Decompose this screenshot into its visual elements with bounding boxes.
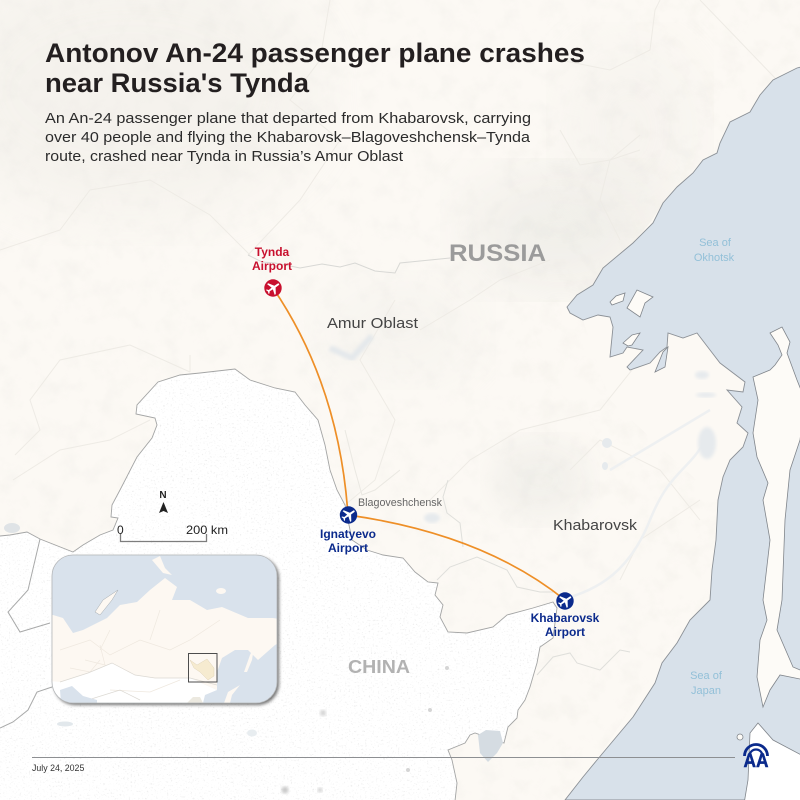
marker: Khabarovsk Airport: Airport xyxy=(545,625,585,639)
Russia-China border and white neighbouring land xyxy=(0,369,557,800)
subtitle: route, crashed near Tynda in Russia’s Amur Oblast xyxy=(45,148,404,165)
lake Khanka xyxy=(478,730,503,762)
marker: Tynda Airport: Airport xyxy=(252,259,292,273)
label: Blagoveshchensk: Blagoveshchensk xyxy=(358,497,442,509)
label: Sea of Okhotsk xyxy=(694,237,735,264)
speckled settlements xyxy=(0,370,555,800)
marker: Khabarovsk Airport: Khabarovsk xyxy=(531,611,600,625)
inset: Severnaya Zemlya xyxy=(152,556,172,575)
marker: Ignatyevo Airport: Ignatyevo xyxy=(320,527,376,541)
seas: Okhotsk and Japan xyxy=(565,60,800,800)
inset: borders xyxy=(60,610,220,692)
label: Sea of Okhotsk: Sea of xyxy=(699,237,732,249)
label: Sea of Okhotsk: Okhotsk xyxy=(694,252,735,264)
label: Russia: RUSSIA xyxy=(449,240,546,267)
label: Khabarovsk region: Khabarovsk xyxy=(553,517,638,534)
map background: land xyxy=(2,3,672,506)
inset locator map xyxy=(52,554,282,708)
label: Sea of Japan: Japan xyxy=(691,685,721,697)
title xyxy=(45,38,585,98)
inset: Japan xyxy=(224,685,240,703)
marker: Tynda Airport: Tynda xyxy=(255,245,290,259)
marker: Ignatyevo Airport xyxy=(320,505,376,555)
inset: Sakhalin xyxy=(244,653,253,672)
inset: Caspian Sea xyxy=(60,686,97,703)
subtitle: An An-24 passenger plane that departed from Khabarovsk, carrying xyxy=(45,110,531,127)
scale bar xyxy=(117,523,228,542)
marker: Tynda Airport xyxy=(252,245,292,297)
label: China: CHINA xyxy=(348,657,410,677)
logo: Anadolu Agency: AA xyxy=(744,751,769,772)
north arrow xyxy=(159,490,168,513)
subtitle: over 40 people and flying the Khabarovsk–Blagoveshchensk–Tynda xyxy=(45,129,531,146)
scale bar: 200 km xyxy=(186,523,228,537)
north arrow: N xyxy=(159,490,167,501)
islands xyxy=(610,290,800,800)
scale bar: 0 xyxy=(117,523,124,537)
inset: Korea xyxy=(188,697,202,702)
label: Amur Oblast: Amur Oblast xyxy=(327,315,419,332)
label: Sea of Japan xyxy=(690,670,723,697)
inset: Novaya Zemlya xyxy=(95,590,118,615)
inset: locator box xyxy=(188,654,217,682)
rivers and lakes xyxy=(4,336,716,600)
footer rule xyxy=(32,756,735,758)
inset: Amur Oblast highlight xyxy=(190,659,214,680)
inset: Russian landmass xyxy=(40,578,285,690)
label: Sea of Japan: Sea of xyxy=(690,670,723,682)
title: near Russia's Tynda xyxy=(45,68,310,98)
title: Antonov An-24 passenger plane crashes xyxy=(45,38,585,68)
marker: Ignatyevo Airport: Airport xyxy=(328,541,368,555)
marker: Khabarovsk Airport xyxy=(531,591,600,639)
internal border lines xyxy=(0,255,630,728)
regional borders xyxy=(0,0,775,580)
flight route xyxy=(273,288,565,600)
inset: southern land xyxy=(52,664,216,703)
subtitle xyxy=(45,110,531,165)
date: July 24, 2025 xyxy=(32,763,84,773)
